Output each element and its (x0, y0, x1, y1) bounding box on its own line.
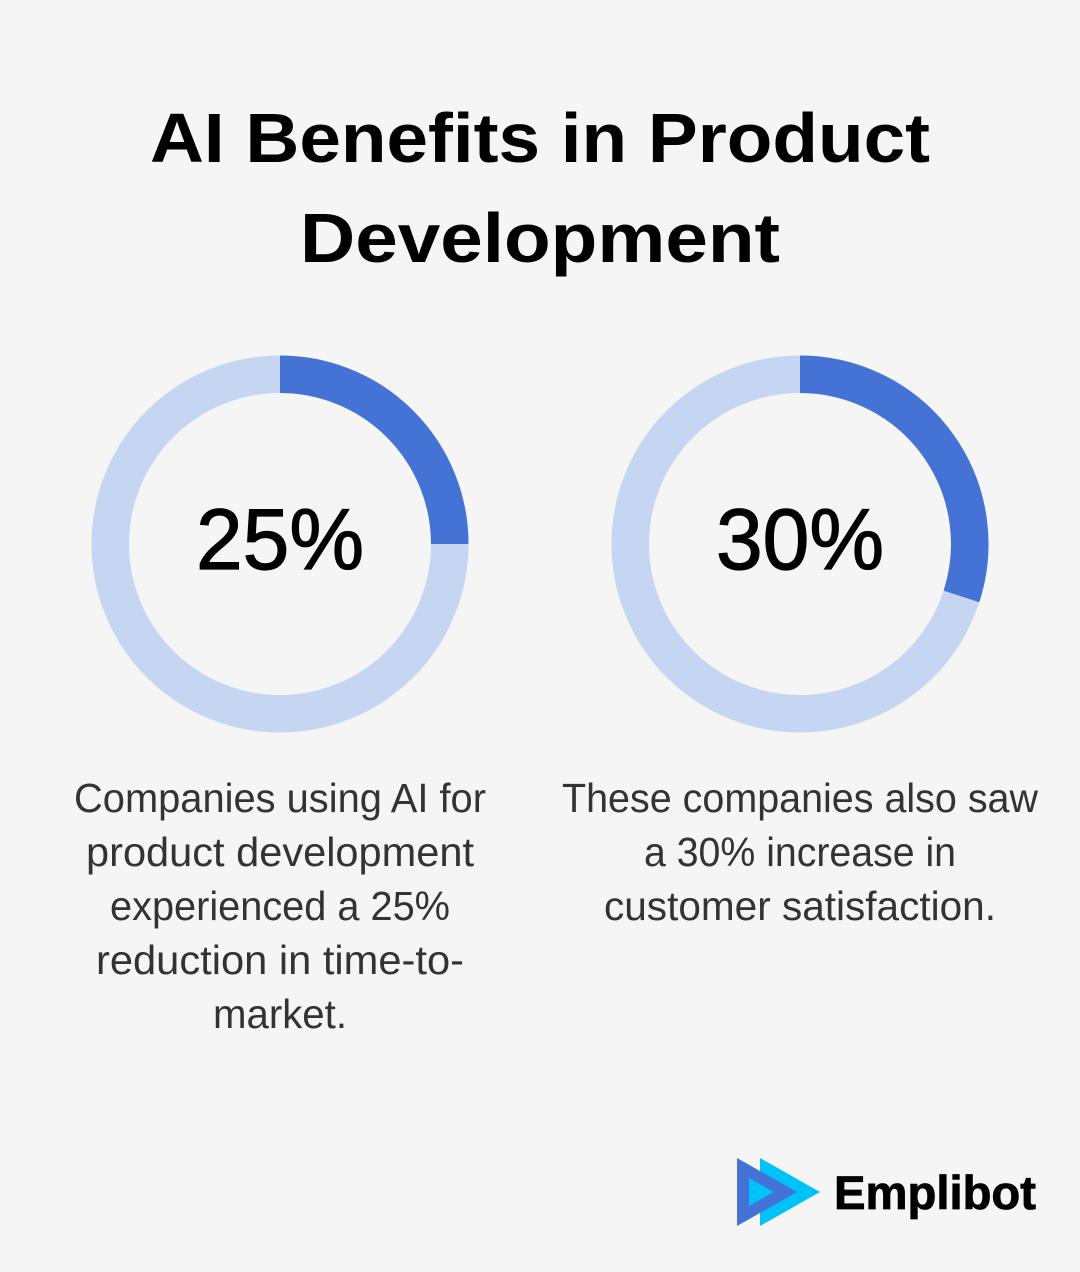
logo wordmark: Emplibot (834, 1166, 1036, 1219)
description: 30% stat: a 30% increase in (644, 829, 956, 875)
donut chart: 25%: 25% (196, 492, 364, 588)
title: AI Benefits in Product (150, 99, 930, 177)
donut chart: 30%: 30% (716, 492, 884, 588)
title (150, 99, 930, 277)
description: 25% stat: product development (86, 829, 475, 875)
logo: Emplibot (737, 1158, 1036, 1226)
description: 30% stat (562, 775, 1038, 929)
description: 25% stat: market. (213, 991, 347, 1037)
description: 25% stat: reduction in time-to- (96, 937, 464, 983)
description: 25% stat (74, 775, 486, 1037)
donut chart: 25% (110, 374, 450, 714)
description: 25% stat: experienced a 25% (110, 883, 450, 929)
description: 30% stat: These companies also saw (562, 775, 1038, 821)
panel: 25% stat (74, 374, 486, 1037)
icon: play triangles (737, 1158, 820, 1226)
description: 25% stat: Companies using AI for (74, 775, 486, 821)
donut chart: 30% (630, 374, 970, 714)
title: Development (300, 199, 780, 277)
description: 30% stat: customer satisfaction. (604, 883, 996, 929)
panel: 30% stat (562, 374, 1038, 929)
